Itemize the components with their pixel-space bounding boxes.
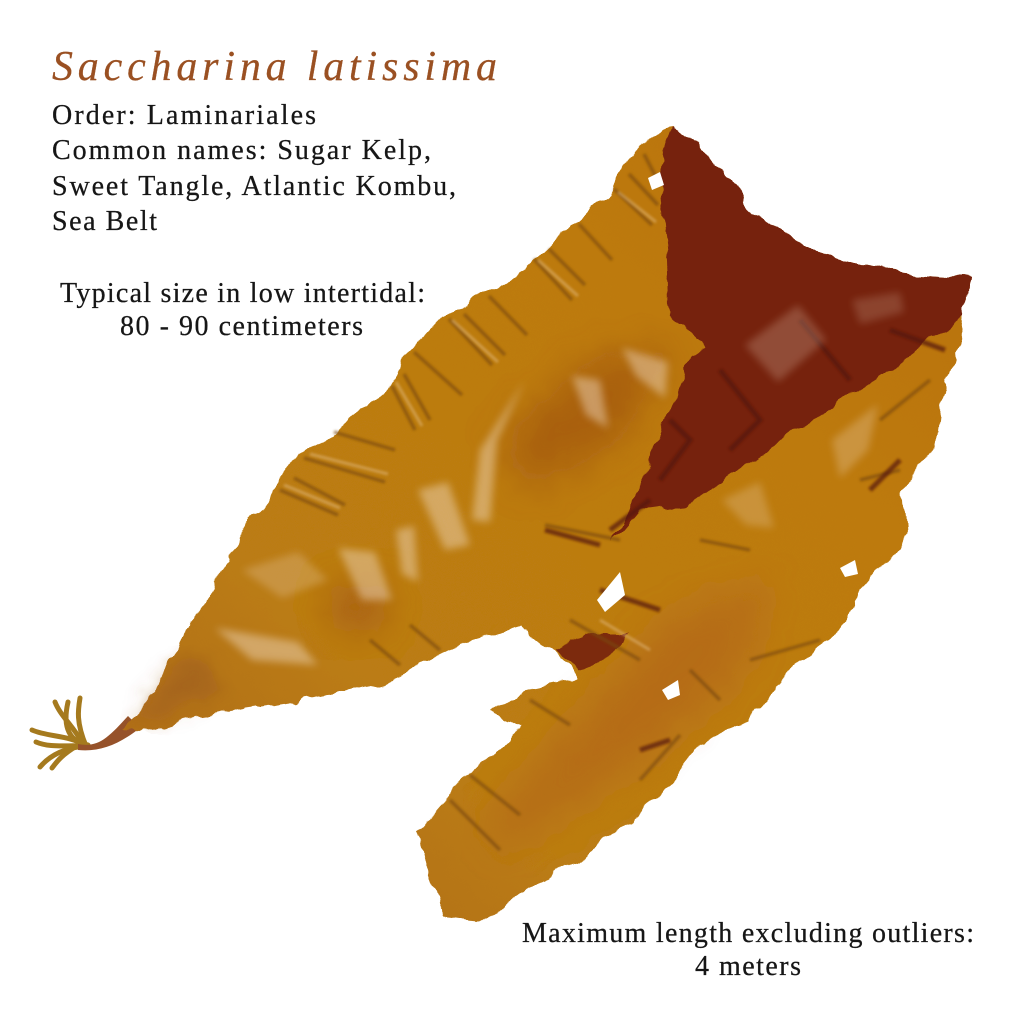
kelp illustration: [32, 122, 970, 922]
holdfast: [32, 698, 88, 768]
species details: [52, 100, 456, 237]
typical size note: Typical size in low intertidal:: [60, 278, 425, 309]
dark red tip section: [612, 122, 970, 545]
species details: Order: Laminariales: [52, 100, 316, 131]
typical size note: [60, 278, 425, 342]
typical size note: 80 - 90 centimeters: [120, 311, 363, 342]
maximum length note: 4 meters: [695, 951, 801, 982]
glossy highlights: [215, 292, 904, 665]
stipe: [78, 716, 140, 750]
dark folds at colour boundary: [545, 320, 945, 750]
species details: Sweet Tangle, Atlantic Kombu,: [52, 171, 456, 202]
species details: Common names: Sugar Kelp,: [52, 135, 431, 166]
holes in blade: [597, 172, 858, 700]
edge ruffles: [280, 154, 930, 850]
light ruffle glints: [284, 192, 656, 650]
base reddish shading: [130, 650, 225, 725]
lower fork dark patch: [555, 632, 628, 672]
speckled lower band: [490, 580, 770, 850]
blade: base shape with ruffled edge: [122, 122, 970, 922]
maximum length note: Maximum length excluding outliers:: [522, 918, 974, 949]
maximum length note: [522, 918, 974, 982]
darker central shading: [330, 345, 680, 630]
species details: Sea Belt: [52, 206, 157, 237]
title: Saccharina latissima: [52, 44, 497, 90]
